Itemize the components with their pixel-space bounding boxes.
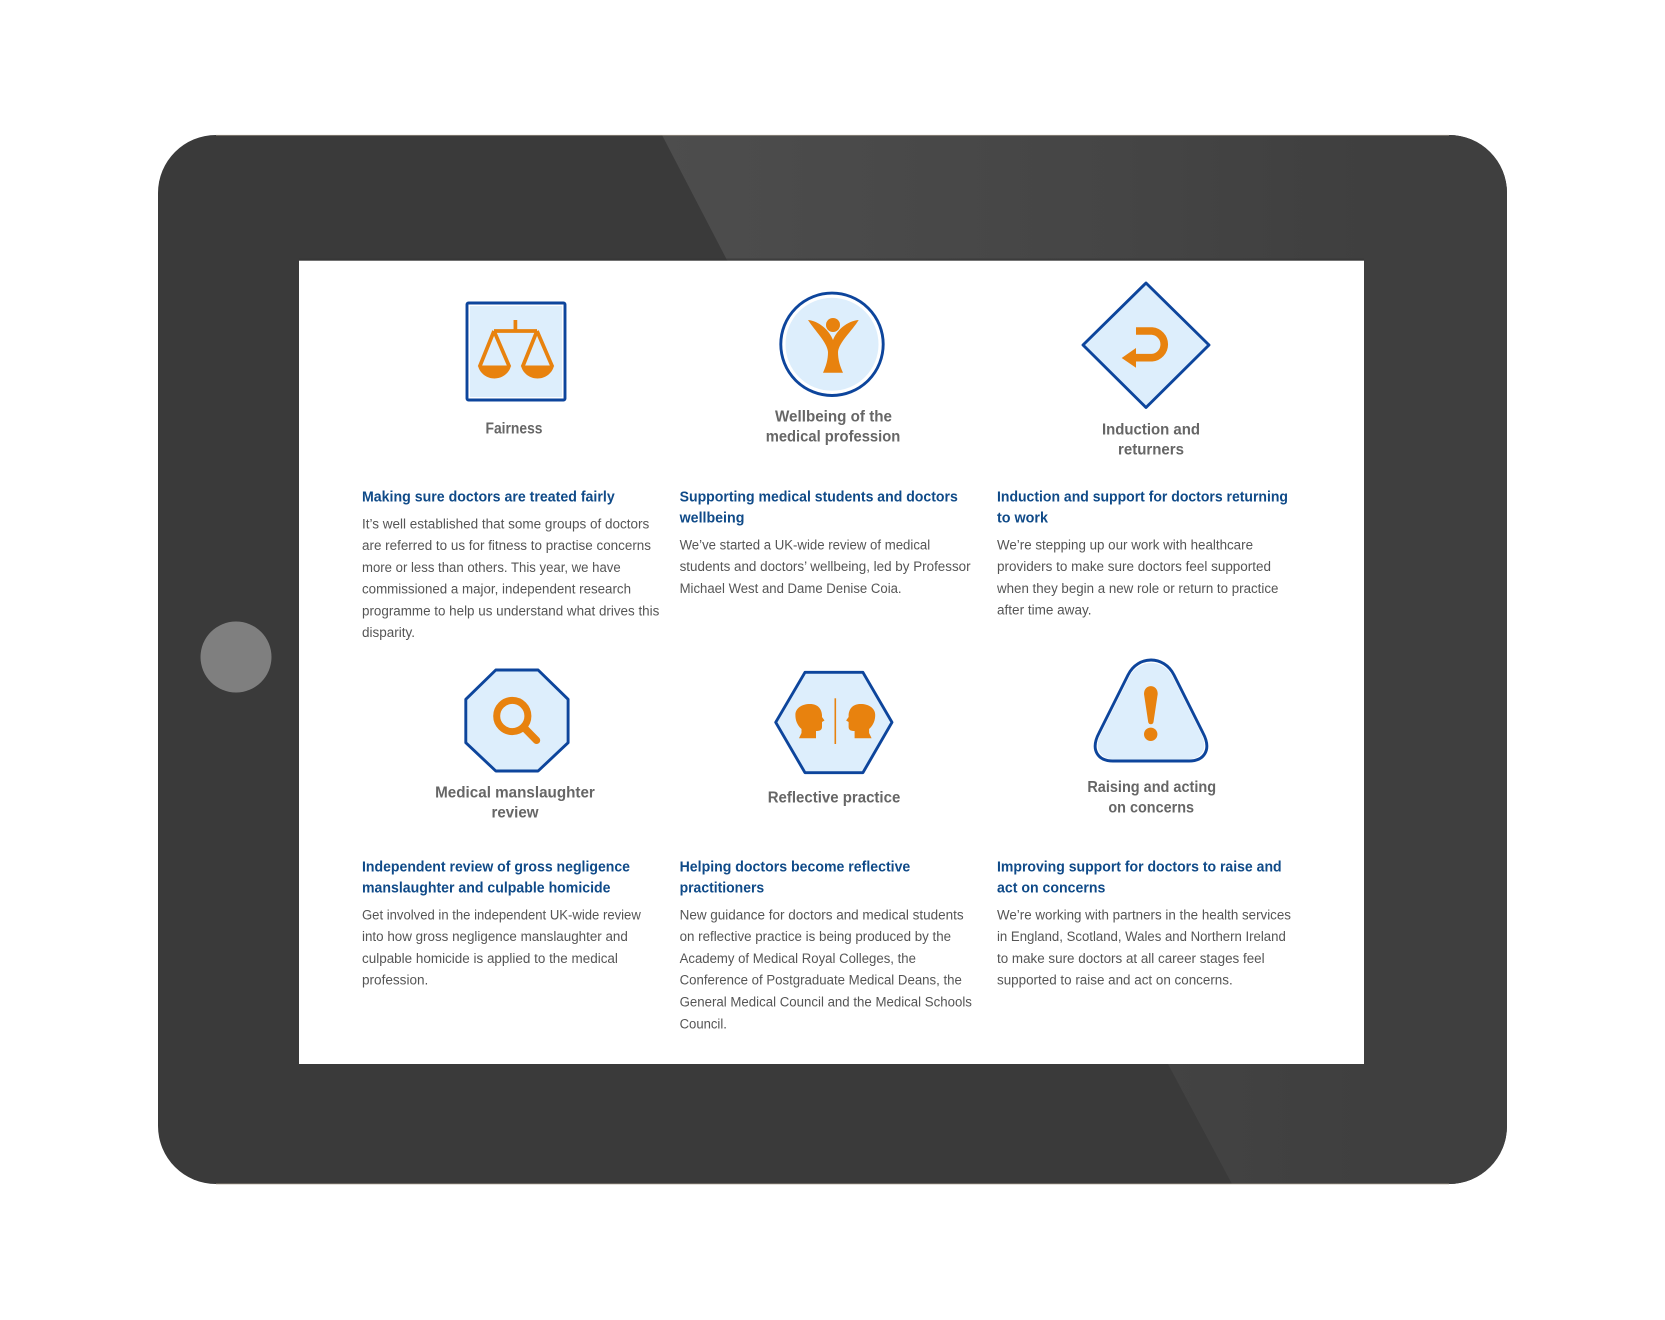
text: wellbeing: Supporting medical students and doctors [680, 490, 958, 506]
icon: raising concerns warning [1095, 660, 1207, 761]
label: Induction and returners: Induction and [1102, 421, 1200, 438]
text: raising concerns: act on concerns [997, 881, 1105, 897]
text: wellbeing: Michael West and Dame Denise Coia. [680, 581, 902, 596]
text: raising concerns: Improving support for doctors to raise and [997, 860, 1282, 876]
tablet device [158, 135, 1507, 1184]
text: manslaughter review: Independent review of gross negligence [362, 860, 630, 876]
text: raising concerns: supported to raise and act on concerns. [997, 973, 1233, 988]
text: reflective practitioners: practitioners [680, 881, 764, 897]
text: reflective practitioners: General Medical Council and the Medical Schools [680, 994, 972, 1010]
tablet home button [200, 622, 272, 692]
text: induction: We’re stepping up our work with healthcare [997, 537, 1253, 552]
text: induction: when they begin a new role or return to practice [996, 581, 1278, 596]
text: raising concerns: in England, Scotland, Wales and Northern Ireland [997, 929, 1286, 944]
label: Reflective practice: Reflective practice [768, 790, 900, 807]
text: manslaughter review: manslaughter and culpable homicide [362, 881, 610, 897]
text: raising concerns: We’re working with partners in the health services [997, 907, 1291, 922]
text: wellbeing [679, 490, 971, 596]
text: wellbeing: We’ve started a UK-wide review of medical [680, 537, 930, 552]
label: Raising and acting on concerns [1087, 779, 1216, 816]
label: Raising and acting on concerns: on concerns [1108, 799, 1194, 816]
icon: wellbeing figure [781, 293, 883, 395]
label: Medical manslaughter review [435, 784, 595, 822]
label: Wellbeing of the medical profession: medical profession [766, 429, 900, 446]
text: manslaughter review: profession. [362, 973, 428, 988]
text: wellbeing: students and doctors’ wellbeing, led by Professor [680, 559, 971, 574]
text: manslaughter review: culpable homicide is applied to the medical [362, 951, 618, 966]
text: induction: Induction and support for doctors returning [997, 490, 1288, 506]
text: manslaughter review: Get involved in the independent UK-wide review [362, 907, 641, 922]
tablet screen [299, 261, 1364, 1064]
text: reflective practitioners [680, 860, 972, 1031]
text: manslaughter review: into how gross negligence manslaughter and [362, 929, 628, 944]
label: Wellbeing of the medical profession [766, 408, 900, 446]
text: wellbeing: wellbeing [679, 511, 744, 527]
text: fairness: more or less than others. This year, we have [362, 560, 621, 575]
label: Medical manslaughter review: Medical manslaughter [435, 784, 595, 801]
text: fairness: commissioned a major, independent research [362, 582, 631, 597]
label: Medical manslaughter review: review [492, 805, 539, 822]
text: reflective practitioners: Conference of Postgraduate Medical Deans, the [680, 973, 962, 988]
icon: fairness scales [467, 303, 565, 400]
icon: reflective heads [776, 672, 892, 773]
text: induction: providers to make sure doctors feel supported [997, 559, 1271, 574]
text: fairness: Making sure doctors are treated fairly [362, 490, 615, 506]
text: raising concerns: to make sure doctors at all career stages feel [997, 951, 1265, 966]
text: induction [996, 490, 1288, 618]
label: Fairness: Fairness [486, 420, 543, 437]
text: induction: to work [997, 511, 1049, 527]
label: Raising and acting on concerns: Raising and acting [1087, 779, 1216, 796]
text: fairness: It’s well established that some groups of doctors [362, 516, 650, 532]
text: reflective practitioners: Council. [680, 1016, 727, 1031]
label: Wellbeing of the medical profession: Wellbeing of the [775, 408, 892, 425]
label: Induction and returners [1102, 421, 1200, 459]
text: induction: after time away. [997, 602, 1092, 618]
text: fairness [362, 490, 660, 640]
text: fairness: are referred to us for fitness to practise concerns [362, 538, 651, 553]
icon: induction return arrow [1083, 283, 1209, 408]
text: reflective practitioners: Academy of Medical Royal Colleges, the [680, 951, 916, 966]
text: reflective practitioners: New guidance for doctors and medical students [680, 907, 964, 922]
text: reflective practitioners: Helping doctors become reflective [680, 860, 910, 876]
text: reflective practitioners: on reflective practice is being produced by the [680, 929, 951, 944]
text: manslaughter review [362, 860, 641, 988]
text: fairness: programme to help us understand what drives this [362, 603, 660, 618]
text: raising concerns [997, 860, 1291, 988]
icon: magnifier [466, 670, 568, 771]
text: fairness: disparity. [362, 625, 415, 640]
label: Induction and returners: returners [1118, 442, 1184, 459]
